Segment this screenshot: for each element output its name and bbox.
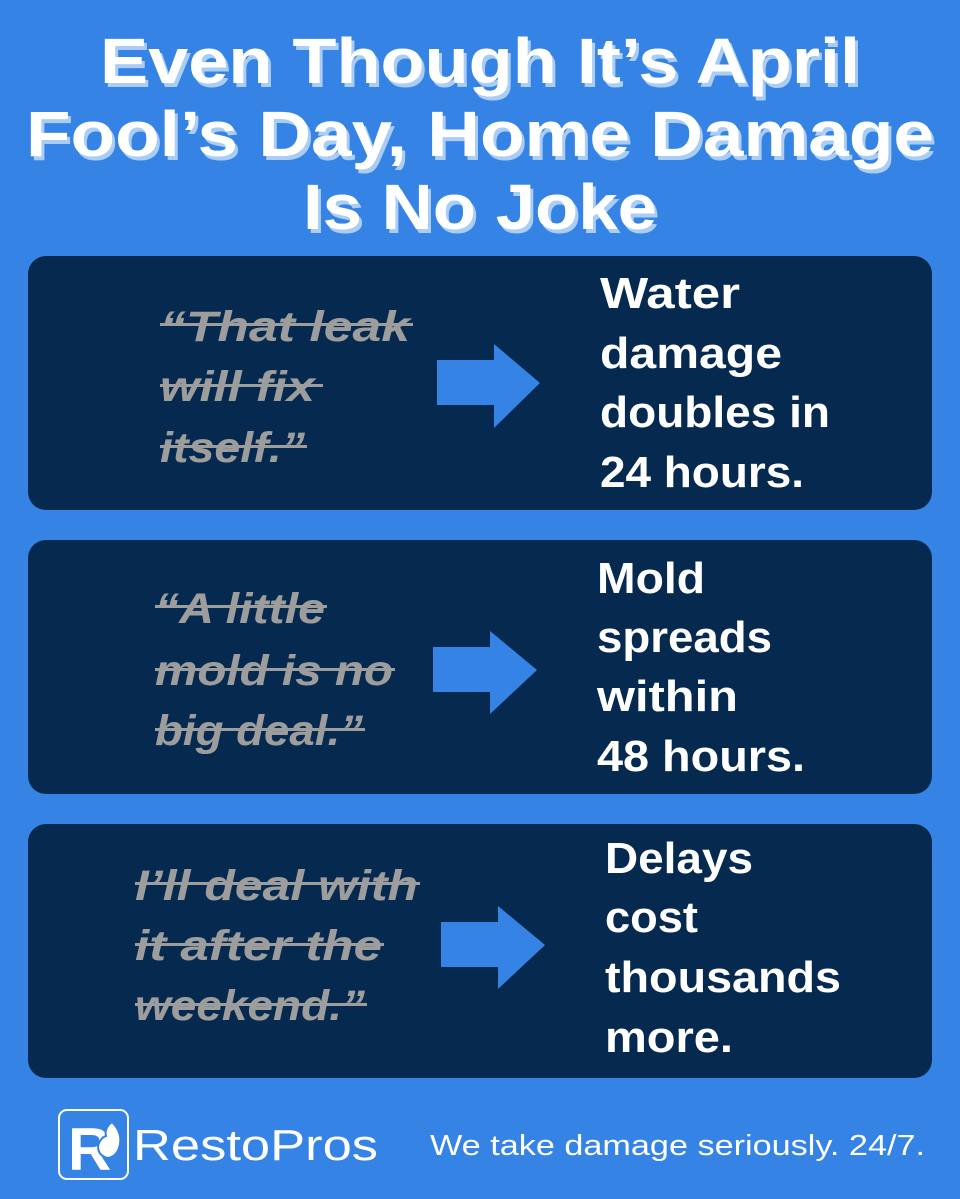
title: Is No Joke	[303, 171, 657, 243]
fact text 1	[600, 269, 830, 497]
myth text 3	[135, 862, 420, 1030]
myth text 3: weekend.”	[135, 982, 366, 1030]
myth text 2: “A little	[155, 585, 325, 633]
title: Even Though It’s April	[103, 29, 863, 101]
fact text 2: Mold	[597, 554, 705, 603]
title: Fool’s Day, Home Damage	[29, 102, 937, 174]
title: Fool’s Day, Home Damage	[26, 98, 934, 170]
fact text 1: Water	[600, 269, 740, 318]
title	[26, 25, 937, 247]
myth text 1: will fix	[160, 363, 317, 411]
myth text 1	[160, 303, 413, 472]
fact text 1: doubles in	[600, 388, 830, 437]
arrow 2	[433, 631, 537, 714]
myth text 2: mold is no	[155, 647, 393, 695]
myth text 3: I’ll deal with	[135, 862, 418, 910]
brand name: RestoPros	[133, 1121, 378, 1170]
myth text 3: it after the	[135, 922, 382, 970]
myth text 2	[155, 585, 395, 755]
panel: delays	[28, 824, 932, 1078]
fact text 2: spreads	[597, 613, 772, 662]
fact text 2: within	[596, 672, 738, 721]
title: Even Though It’s April	[100, 25, 860, 97]
myth text 1: itself.”	[160, 424, 306, 472]
logo	[59, 1110, 378, 1183]
title: Is No Joke	[306, 175, 660, 247]
tagline: We take damage seriously. 24/7.	[430, 1130, 925, 1162]
fact text 3: more.	[605, 1013, 733, 1062]
panel: water damage	[28, 256, 932, 510]
fact text 3: thousands	[605, 953, 841, 1002]
fact text 1: 24 hours.	[600, 448, 804, 497]
fact text 2: 48 hours.	[597, 732, 805, 781]
myth text 1: “That leak	[160, 303, 413, 351]
myth text 2: big deal.”	[155, 707, 364, 755]
fact text 3: cost	[605, 893, 698, 942]
icon: logo box	[59, 1110, 128, 1183]
fact text 1: damage	[600, 329, 782, 378]
arrow 3	[441, 906, 545, 989]
panel: mold	[28, 540, 932, 794]
icon: logo box: R	[68, 1116, 111, 1183]
fact text 2	[596, 554, 805, 781]
fact text 3: Delays	[605, 834, 753, 883]
fact text 3	[605, 834, 841, 1062]
arrow 1	[437, 344, 540, 428]
